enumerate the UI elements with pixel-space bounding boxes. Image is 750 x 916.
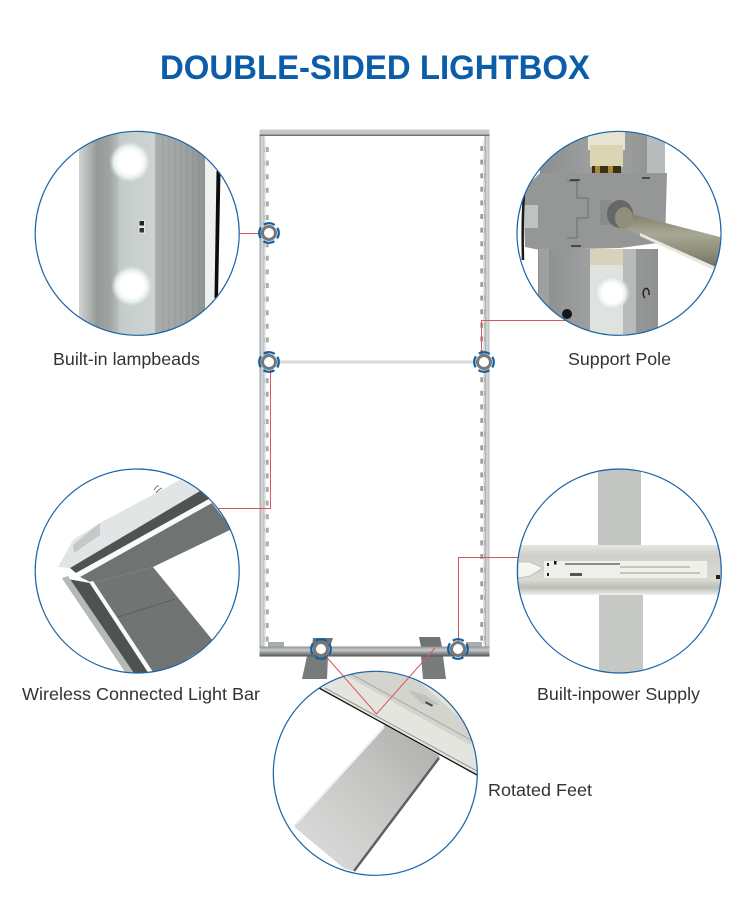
foot: left	[302, 638, 333, 679]
hotspot markers	[259, 223, 494, 659]
detail circle: built-in lampbeads	[35, 125, 239, 340]
detail circle: wireless connected light bar	[35, 469, 239, 682]
label: rotated feet: Rotated Feet	[488, 780, 592, 800]
foot: right	[419, 637, 446, 679]
hotspot: power supply	[448, 639, 468, 659]
hotspot: feet	[311, 639, 331, 659]
label: support pole: Support Pole	[568, 349, 671, 369]
red connector lines	[218, 234, 566, 714]
title: DOUBLE-SIDED LIGHTBOX	[160, 49, 590, 87]
label: built-in lampbeads: Built-in lampbeads	[53, 349, 200, 369]
support pole tube	[626, 214, 720, 266]
hotspot: left crossbar	[259, 352, 279, 372]
detail circle: built-in power supply	[515, 465, 725, 676]
icon: lamp bead top	[110, 143, 148, 181]
detail circle: support pole	[517, 125, 724, 339]
label: built-in power supply: Built-inpower Supply	[537, 684, 700, 704]
hotspot: right crossbar	[474, 352, 494, 372]
detail circle: rotated feet	[272, 670, 478, 876]
icon: lamp bead	[597, 278, 629, 308]
label: wireless connected light bar: Wireless Connected Light Bar	[22, 684, 260, 704]
hotspot: lampbeads	[259, 223, 279, 243]
lightbox frame	[260, 130, 490, 679]
icon: lamp bead bottom	[112, 267, 150, 305]
